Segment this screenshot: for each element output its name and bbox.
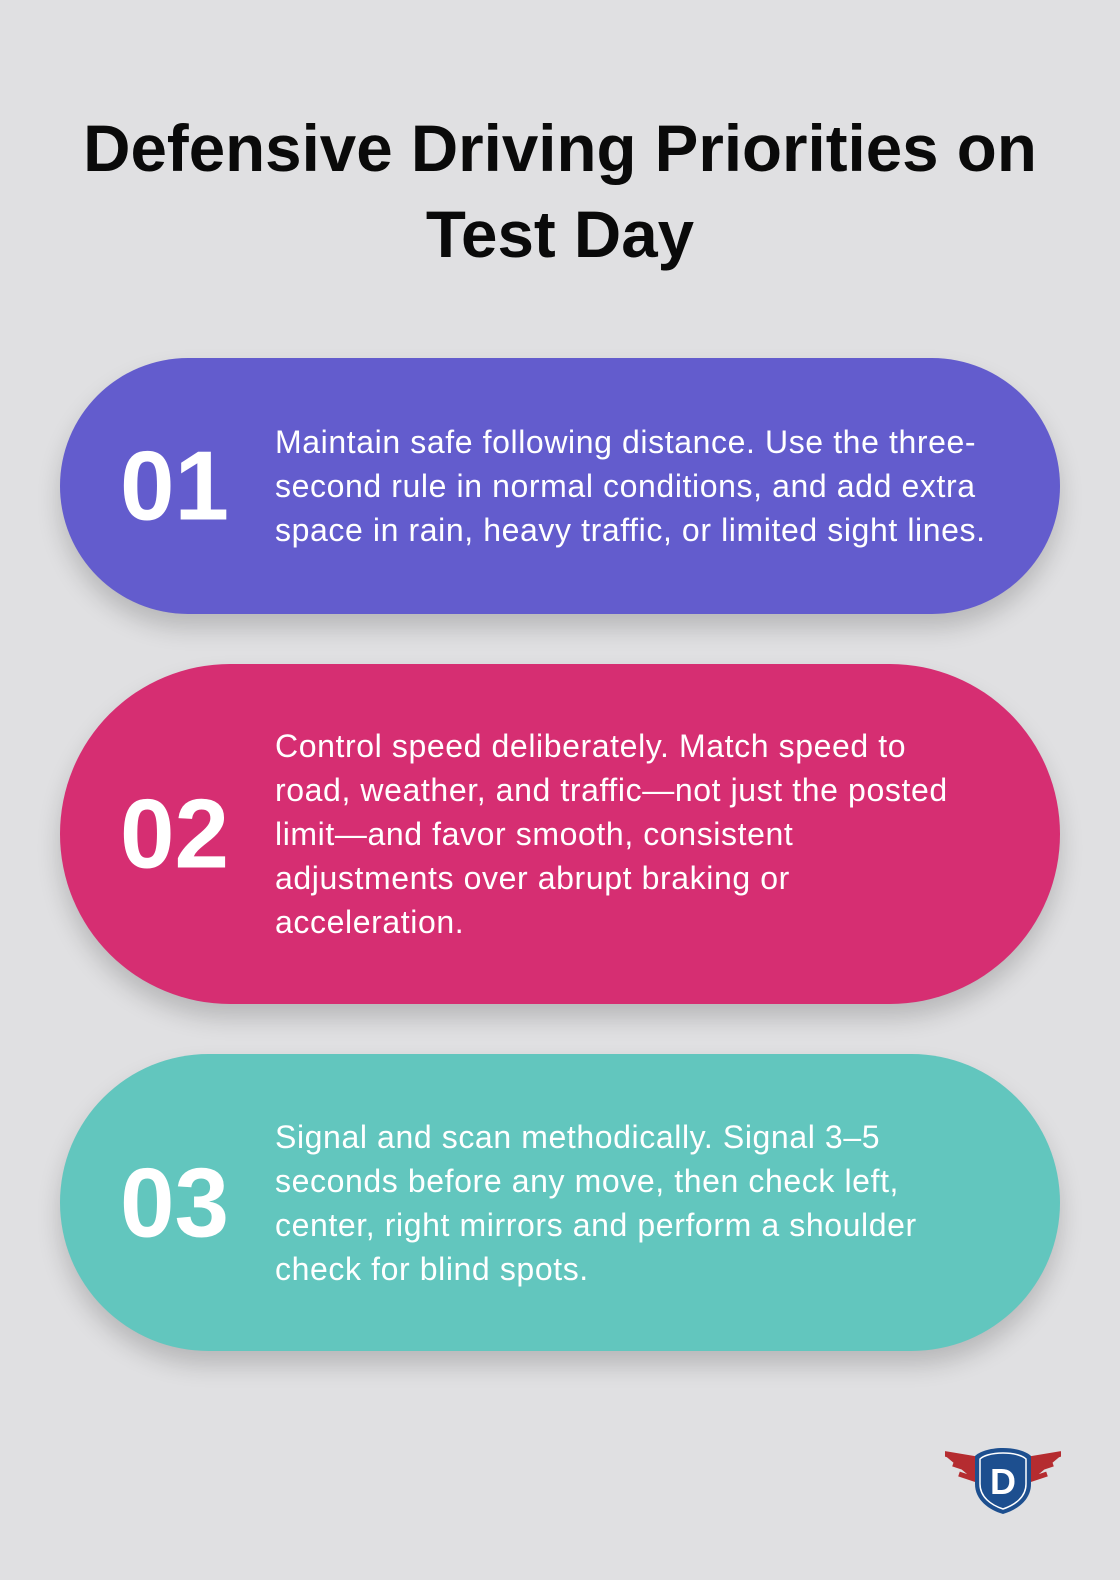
text 02: adjustments over abrupt braking or — [275, 860, 790, 896]
panel: item 03 — [60, 1054, 1060, 1351]
number 02: 02 — [120, 778, 229, 888]
text 01: Maintain safe following distance. Use the three- — [275, 424, 976, 460]
text 02: road, weather, and traffic—not just the posted — [275, 772, 948, 808]
number 03: 03 — [120, 1147, 229, 1257]
text 01: second rule in normal conditions, and add extra — [275, 468, 976, 504]
text 02: Control speed deliberately. Match speed to — [275, 728, 906, 764]
text 03 — [275, 1118, 917, 1286]
text 02 — [275, 728, 948, 940]
panel: item 01 — [60, 358, 1060, 614]
text 02: limit—and favor smooth, consistent — [275, 816, 793, 852]
title: Defensive Driving Priorities on — [83, 112, 1037, 185]
text 03: check for blind spots. — [275, 1250, 589, 1286]
icon: logo: D — [990, 1461, 1016, 1502]
text 01 — [275, 424, 986, 548]
icon: logo — [945, 1448, 1061, 1514]
text 03: center, right mirrors and perform a shoulder — [275, 1206, 917, 1242]
text 02: acceleration. — [275, 904, 464, 940]
text 03: seconds before any move, then check left, — [275, 1162, 899, 1198]
panel: item 02 — [60, 664, 1060, 1004]
title: Test Day — [426, 198, 694, 271]
title — [83, 112, 1037, 271]
text 01: space in rain, heavy traffic, or limited sight lines. — [275, 512, 986, 548]
text 03: Signal and scan methodically. Signal 3–5 — [275, 1118, 880, 1154]
number 01: 01 — [120, 430, 229, 540]
